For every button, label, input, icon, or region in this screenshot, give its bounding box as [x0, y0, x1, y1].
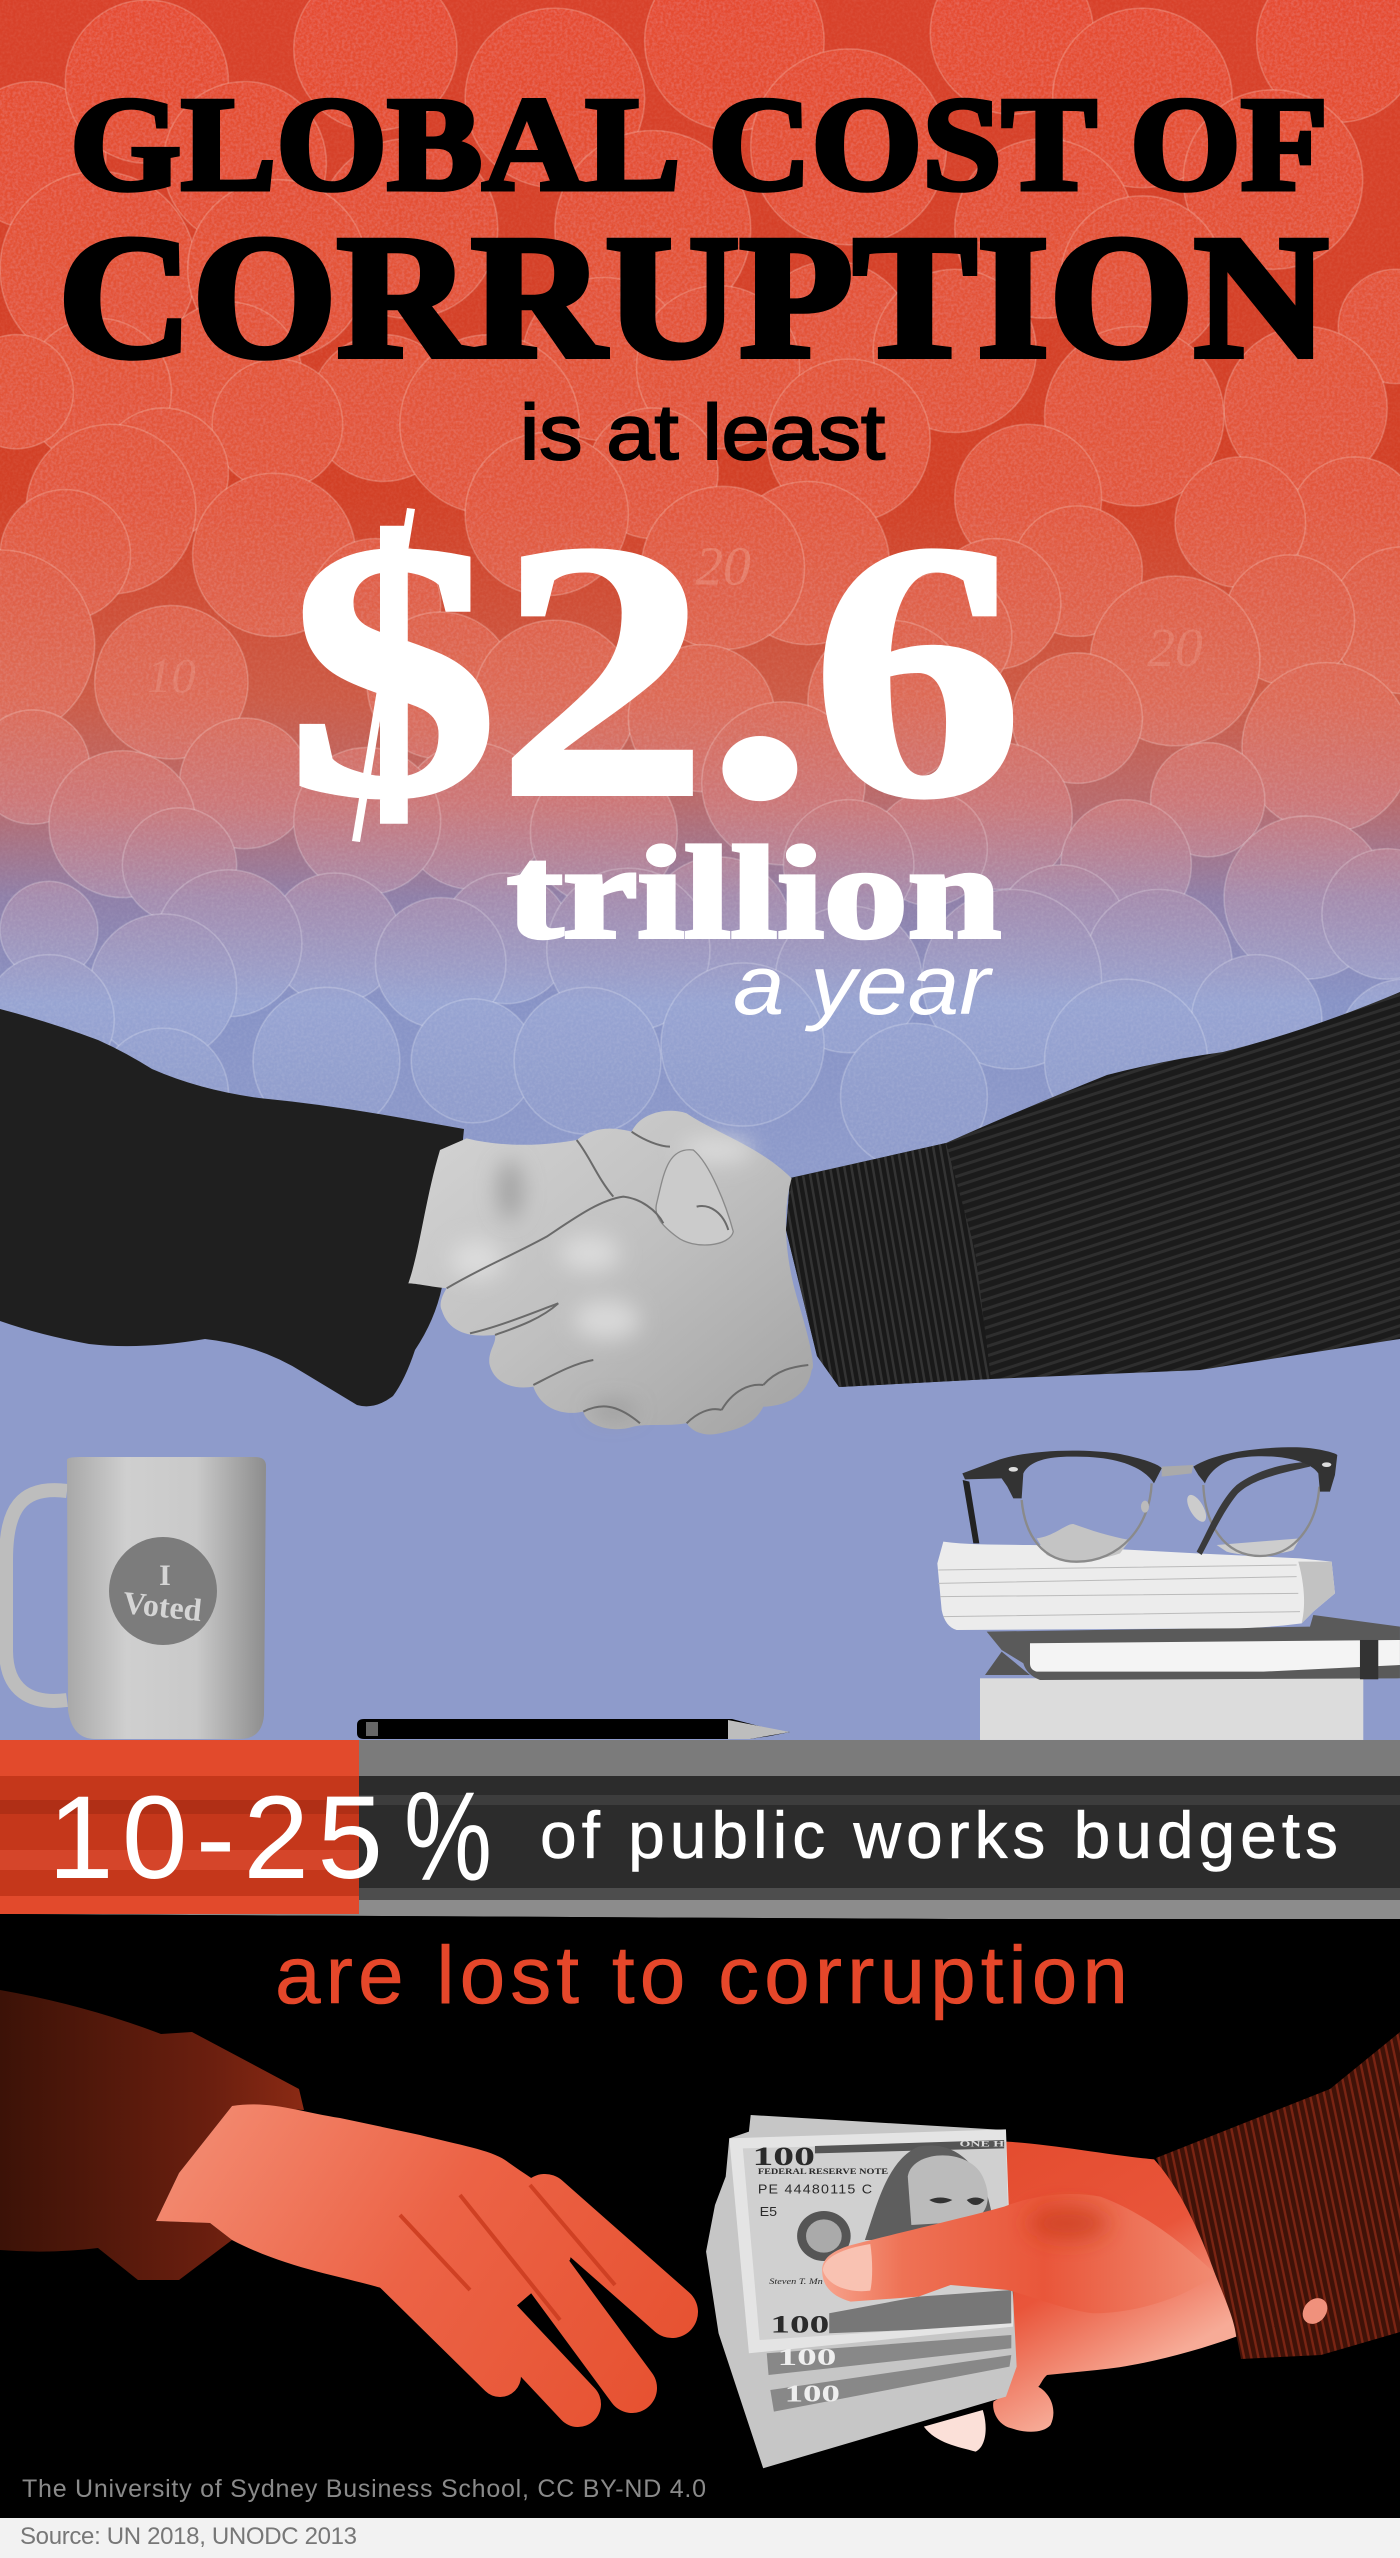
bottom book block	[980, 1678, 1363, 1740]
portrait eyes	[929, 2197, 985, 2205]
sticker text: I	[159, 1559, 171, 1592]
percent sign: %	[404, 1766, 492, 1907]
page lines	[938, 1565, 1300, 1617]
table lower strip	[0, 1900, 1400, 1919]
finger 4	[384, 2262, 500, 2376]
table dark front	[0, 1776, 1400, 1900]
footer bar	[0, 2518, 1400, 2558]
notebook pages	[1030, 1640, 1400, 1672]
thumb over cash	[822, 2194, 1215, 2313]
pale finger below notes	[924, 2410, 986, 2452]
title	[58, 70, 1328, 395]
right temple	[1197, 1462, 1310, 1555]
book spine shadow	[985, 1652, 1030, 1675]
range digits: 10-25	[48, 1772, 383, 1904]
coin pile	[0, 0, 1400, 1170]
finger creases	[447, 1132, 808, 1423]
portrait coat	[829, 2290, 1011, 2333]
banknote stack	[706, 2115, 1017, 2468]
note text: Steven T. Mn	[769, 2276, 823, 2286]
rivets	[1009, 1467, 1018, 1472]
highlights	[450, 1137, 753, 1340]
hand mass	[408, 1111, 813, 1435]
note text: ONE H	[960, 2139, 1004, 2149]
table grey top band	[0, 1740, 1400, 1778]
middle notebook	[987, 1615, 1400, 1680]
title line 1: GLOBAL COST OF	[70, 70, 1328, 218]
note text: 100	[777, 2345, 836, 2371]
note text: E5	[760, 2203, 777, 2219]
treasury seal	[797, 2211, 851, 2261]
handshake	[0, 992, 1400, 1435]
credit line: The University of Sydney Business School, CC BY-ND 4.0	[22, 2475, 706, 2503]
shadows	[497, 1160, 637, 1418]
cufflink	[1298, 2293, 1332, 2329]
title line 2: CORRUPTION	[58, 200, 1328, 395]
glasses	[962, 1447, 1337, 1562]
right palm	[993, 2142, 1236, 2432]
note text: FEDERAL RESERVE NOTE	[758, 2166, 888, 2176]
finger 1	[545, 2200, 672, 2312]
red highlighted part of table	[0, 1740, 359, 1778]
portrait face	[908, 2155, 988, 2225]
top book	[937, 1542, 1335, 1630]
flat lower blue background	[0, 1180, 1400, 1740]
figure unit: trillion: trillion	[507, 819, 1001, 966]
mug body	[67, 1457, 266, 1739]
source line: Source: UN 2018, UNODC 2013	[20, 2523, 357, 2550]
note text: 100	[752, 2141, 815, 2171]
sticker text	[121, 1559, 204, 1628]
fingers	[384, 2200, 672, 2404]
pencil tip	[728, 1720, 790, 1739]
sticker	[109, 1537, 217, 1645]
finger 2	[520, 2236, 632, 2388]
thumb shadow	[1029, 2207, 1108, 2240]
lens rims	[1022, 1483, 1319, 1562]
bridge	[1162, 1465, 1193, 1477]
mug with I Voted sticker	[6, 1457, 266, 1739]
right sleeve	[786, 992, 1400, 1387]
background gradient	[0, 0, 1400, 1900]
right browline	[1193, 1447, 1337, 1492]
black lower panel	[0, 1914, 1400, 2518]
left temple	[963, 1480, 979, 1543]
front note print	[743, 2142, 1011, 2340]
book peak seen through lens	[1037, 1524, 1130, 1560]
left browline	[962, 1451, 1162, 1498]
figure period: a year: a year	[733, 938, 993, 1032]
left sleeve	[0, 1009, 464, 1406]
lower note bands	[767, 2335, 1011, 2375]
figure text: $2.6	[288, 468, 1022, 872]
front note paper	[729, 2129, 1013, 2353]
statistic label: of public works budgets	[540, 1798, 1338, 1872]
note text: PE 44480115 C	[758, 2181, 872, 2196]
left sleeve	[0, 1990, 304, 2280]
subheading: is at least: is at least	[520, 388, 885, 476]
portrait hair	[865, 2146, 992, 2240]
dollar sign slanted stroke	[352, 508, 415, 842]
note text	[752, 2139, 1004, 2407]
note text: 100	[770, 2310, 829, 2338]
bribe: cash in hand	[706, 2032, 1400, 2468]
table top	[0, 1740, 1400, 1919]
bribe: offering hand	[0, 1990, 672, 2404]
note text: 100	[785, 2381, 840, 2407]
right sleeve	[1156, 2032, 1400, 2359]
note top band	[815, 2140, 1004, 2153]
nose pad	[1183, 1492, 1210, 1525]
mug handle	[6, 1490, 67, 1701]
notebook strap	[1360, 1640, 1378, 1679]
top book fore edge	[1298, 1562, 1335, 1623]
thumb nail	[823, 2244, 872, 2291]
clasped hands	[408, 1111, 813, 1435]
pencil	[357, 1719, 790, 1739]
hand shading	[400, 2185, 615, 2320]
palm	[156, 2104, 580, 2320]
statistic: 10-25%	[48, 1766, 492, 1907]
thumb	[656, 1150, 733, 1245]
stack of books with glasses	[937, 1447, 1400, 1740]
finger 3	[440, 2257, 578, 2404]
coin pile: 20	[1147, 618, 1203, 679]
coin pile: 10	[147, 648, 196, 703]
right shirt cuff	[786, 1143, 991, 1387]
big figure: $2.6	[288, 468, 1022, 872]
sticker text: Voted	[121, 1584, 204, 1628]
hand and notes	[706, 2115, 1236, 2468]
statement: are lost to corruption: are lost to corruption	[275, 1930, 1128, 2021]
coin pile: 20	[695, 536, 751, 597]
